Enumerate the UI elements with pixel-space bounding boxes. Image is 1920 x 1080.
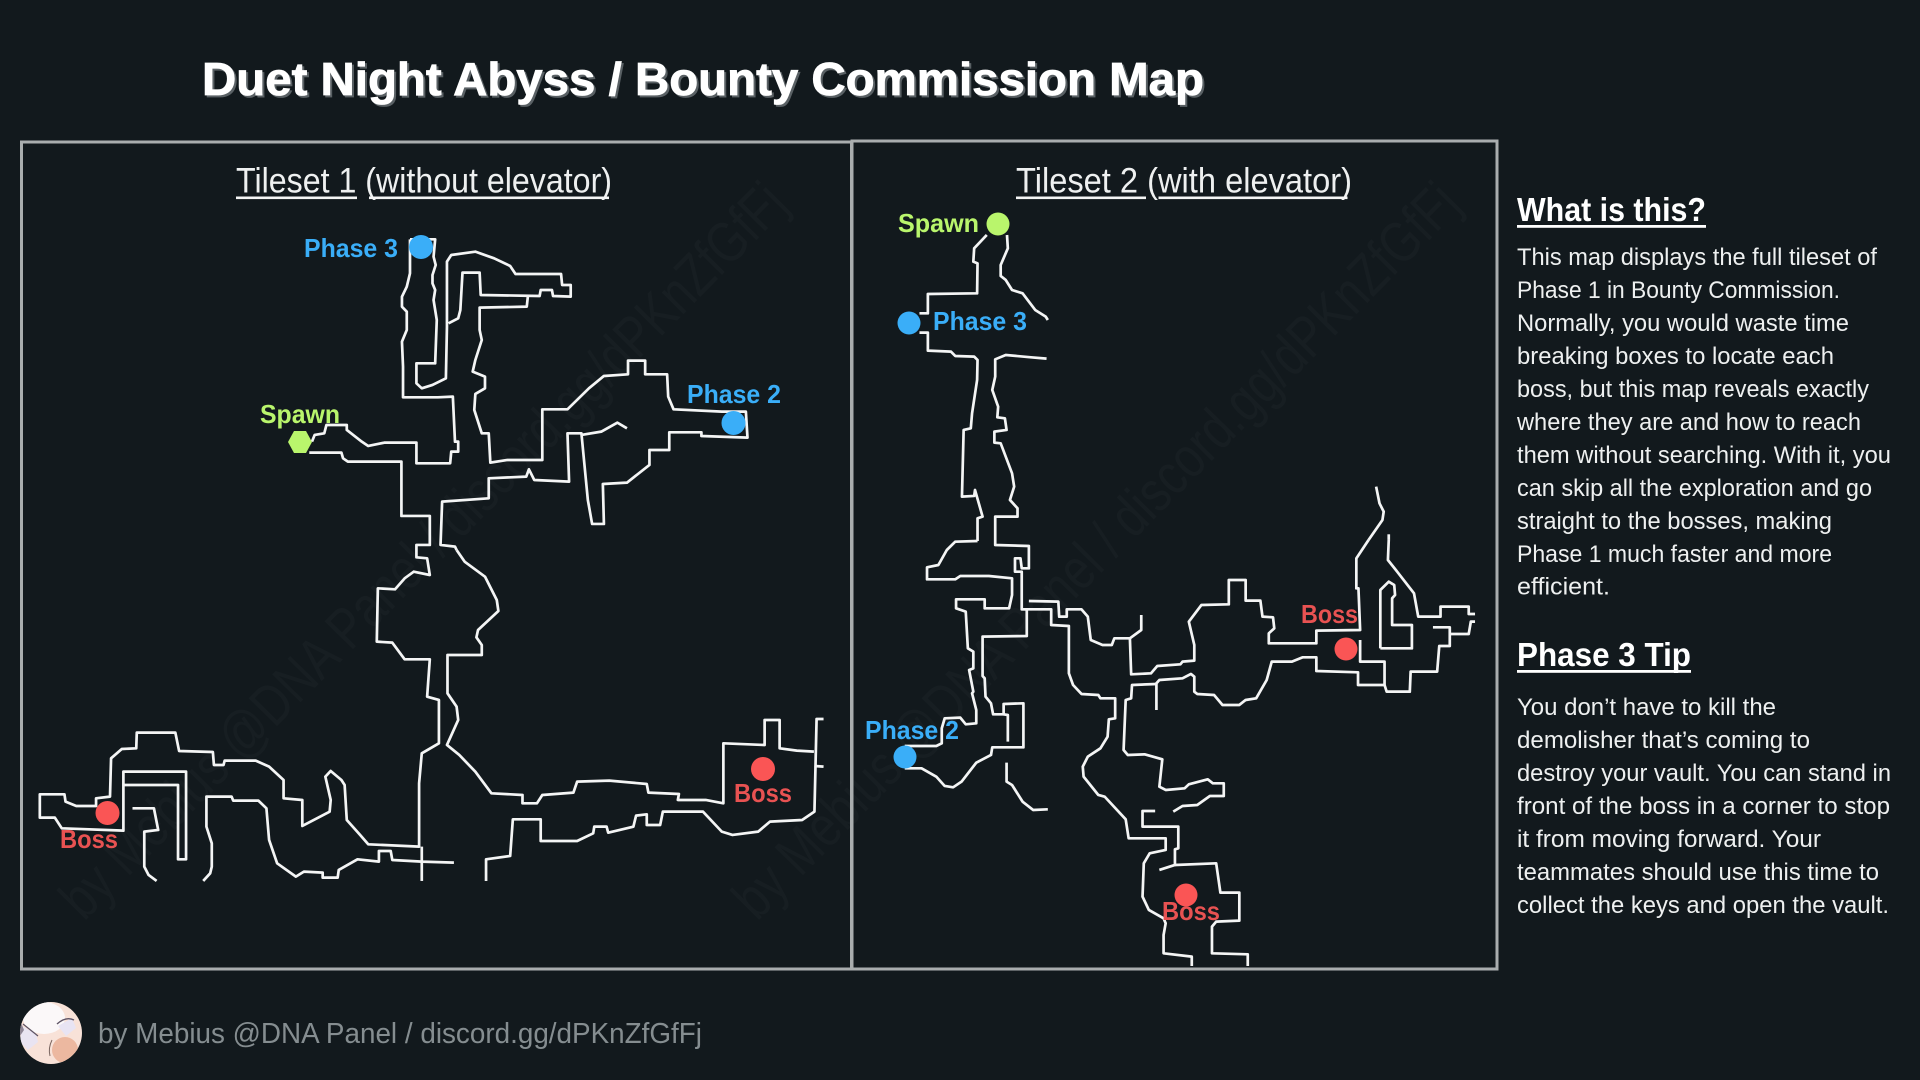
text block: phase 3 tip: teammates should use this time to: [1517, 859, 1879, 886]
marker: tileset 1 phase 2: [687, 379, 781, 435]
text block: what is this: them without searching. With it, you: [1517, 442, 1891, 469]
marker: tileset 2 boss right: Boss: [1301, 599, 1358, 629]
text block: phase 3 tip: front of the boss in a corner to stop: [1517, 793, 1890, 820]
text block: what is this: [1516, 244, 1891, 600]
text block: phase 3 tip: it from moving forward. Your: [1517, 826, 1821, 853]
map: tileset 1 corridors: [40, 239, 824, 881]
text block: what is this: Phase 1 in Bounty Commission.: [1517, 277, 1840, 304]
marker: tileset 2 phase 2: Phase 2: [865, 715, 959, 745]
text block: phase 3 tip: collect the keys and open the vault.: [1517, 892, 1889, 919]
text block: what is this: This map displays the full tileset of: [1517, 244, 1877, 271]
marker: tileset 1 spawn: Spawn: [260, 399, 340, 429]
text block: what is this: straight to the bosses, making: [1517, 508, 1832, 535]
text block: what is this: breaking boxes to locate each: [1517, 343, 1834, 370]
marker: tileset 2 spawn: Spawn: [898, 208, 979, 238]
marker: tileset 1 boss right: [734, 757, 792, 808]
marker: tileset 1 boss left: [60, 801, 120, 854]
marker: tileset 1 phase 2: Phase 2: [687, 379, 781, 409]
title: Duet Night Abyss / Bounty Commission Map: [202, 53, 1204, 105]
text block: what is this: Phase 1 much faster and more: [1517, 541, 1832, 568]
text block: what is this: where they are and how to reach: [1516, 409, 1861, 436]
text block: phase 3 tip: demolisher that’s coming to: [1517, 727, 1810, 754]
map: tileset 2 corridors: [905, 235, 1475, 966]
marker: tileset 2 boss bottom: Boss: [1162, 896, 1220, 926]
marker: tileset 1 spawn: [260, 399, 340, 453]
heading: phase 3 tip: Phase 3 Tip: [1517, 636, 1691, 673]
marker: tileset 1 boss left: Boss: [60, 824, 118, 854]
marker: tileset 1 phase 3: Phase 3: [304, 233, 398, 263]
text block: what is this: efficient.: [1517, 574, 1610, 600]
watermark: left map: by Mebius @DNA Panel / discord.gg/dPKnZfGfFj: [47, 170, 799, 931]
heading: tileset 2: Tileset 2 (with elevator): [1016, 162, 1352, 200]
text block: what is this: can skip all the exploration and go: [1517, 475, 1872, 502]
heading: what is this: What is this?: [1517, 191, 1706, 228]
panel: explanation text: [1516, 191, 1891, 919]
marker: tileset 2 phase 3: Phase 3: [933, 306, 1027, 336]
panel: tileset 2: [852, 141, 1497, 969]
icon: author avatar: [20, 1002, 82, 1064]
text block: phase 3 tip: destroy your vault. You can stand in: [1517, 760, 1891, 787]
text block: what is this: Normally, you would waste time: [1517, 310, 1849, 337]
marker: tileset 2 boss right: [1301, 599, 1358, 660]
text block: phase 3 tip: [1517, 694, 1891, 919]
panel: tileset 1: [22, 142, 852, 969]
marker: tileset 2 phase 2: [865, 715, 959, 768]
marker: tileset 1 boss right: Boss: [734, 778, 792, 808]
footer credit: by Mebius @DNA Panel / discord.gg/dPKnZfGfFj: [98, 1018, 702, 1050]
text block: phase 3 tip: You don’t have to kill the: [1517, 694, 1776, 721]
heading: tileset 1: Tileset 1 (without elevator): [236, 162, 612, 200]
text block: what is this: boss, but this map reveals exactly: [1517, 376, 1869, 403]
marker: tileset 2 boss bottom: [1162, 884, 1220, 926]
watermark: right map: by Mebius @DNA Panel / discord.gg/dPKnZfGfFj: [720, 170, 1472, 931]
